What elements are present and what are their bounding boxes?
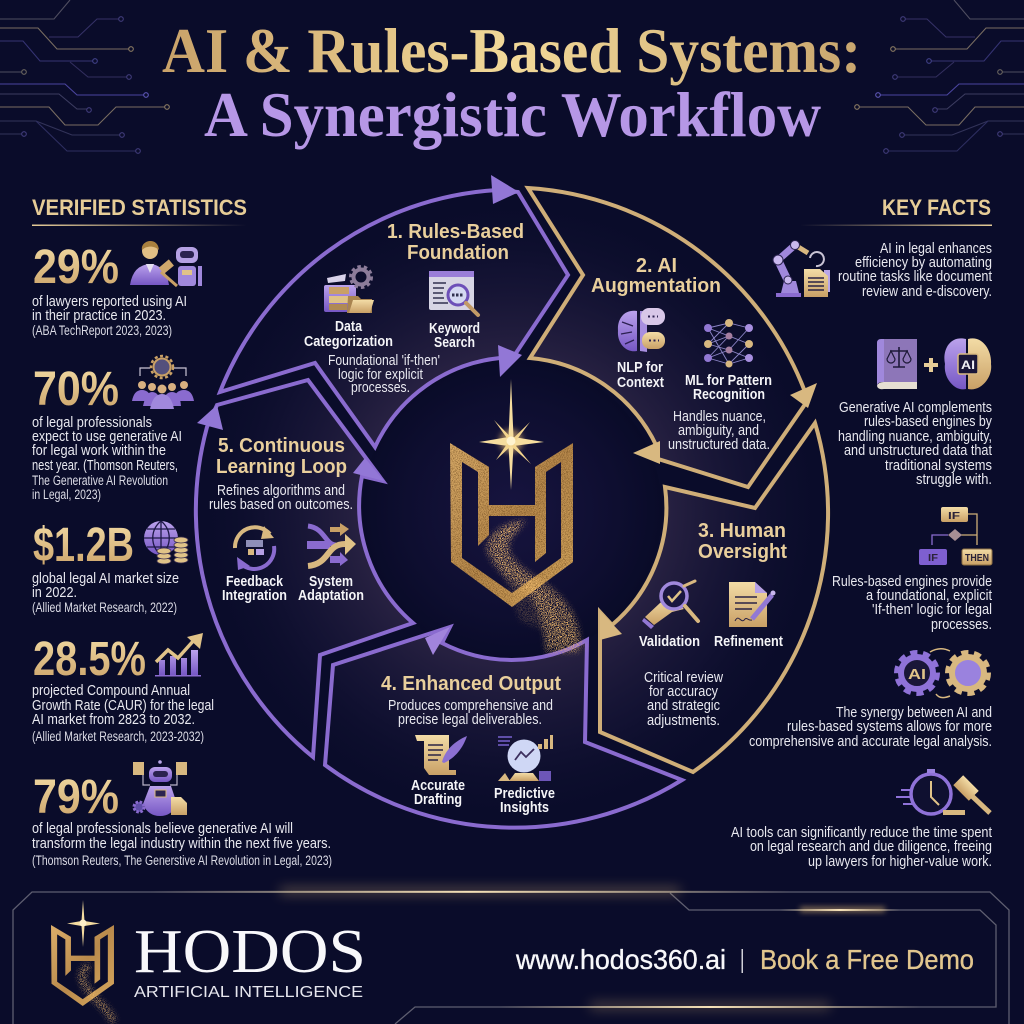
- icon: lawyer and robot: [130, 241, 202, 286]
- text: Rules-based engines provide: [832, 573, 992, 590]
- footer frame: [13, 892, 1009, 1024]
- label: refinement: Refinement: [714, 634, 783, 650]
- panel: step 1 rules-based foundation: [220, 175, 568, 447]
- text: transform the legal industry within the next five years.: [32, 835, 331, 852]
- icon: if-then flowchart: IF: [928, 553, 938, 564]
- description: Refines algorithms and: [217, 482, 345, 499]
- icon: stopwatch and gavel: [896, 769, 990, 815]
- arrowhead: [425, 627, 450, 655]
- text: projected Compound Annual: [32, 682, 190, 699]
- panel: key facts: [731, 195, 993, 870]
- fact 3: [832, 507, 993, 633]
- arrowheads: [197, 405, 384, 481]
- text: struggle with.: [916, 471, 992, 488]
- text: [838, 240, 993, 300]
- description: [388, 697, 553, 728]
- central core disc: [362, 360, 662, 660]
- label: feedback integration: Integration: [222, 588, 287, 604]
- segment outline: [220, 190, 568, 447]
- segment outline: [196, 380, 413, 757]
- description: precise legal deliverables.: [398, 711, 542, 728]
- text: [832, 573, 993, 633]
- circuit lines left: [0, 0, 169, 153]
- text: up lawyers for higher-value work.: [808, 853, 992, 870]
- text: AI market from 2823 to 2032.: [32, 711, 195, 728]
- heading: KEY FACTS: [882, 195, 991, 220]
- icon: globe and coins: [144, 521, 188, 564]
- icon: interlocked gears: [897, 649, 988, 698]
- text: [32, 570, 179, 615]
- icon: law book plus AI brain: AI: [961, 358, 975, 372]
- text: [32, 293, 187, 338]
- label: validation: Validation: [639, 634, 700, 650]
- panel: step 2 AI augmentation: [528, 188, 817, 487]
- stat: 79%: [32, 760, 332, 868]
- description: logic for explicit: [338, 366, 424, 383]
- text: Growth Rate (CAUR) for the legal: [32, 697, 214, 714]
- title: AI & Rules-Based Systems:: [162, 15, 861, 86]
- label: NLP for context: Context: [617, 375, 664, 391]
- heading: 4. Enhanced Output: [381, 673, 561, 695]
- text: [32, 414, 182, 502]
- panel: verified statistics: [32, 195, 332, 868]
- text: AI in legal enhances: [880, 240, 992, 257]
- icon: keyword search: [429, 271, 478, 315]
- icon: robot with documents: [133, 760, 187, 816]
- description: [644, 669, 723, 729]
- label: ML for pattern recognition: Recognition: [693, 387, 765, 403]
- text: [731, 824, 993, 870]
- text: global legal AI market size: [32, 570, 179, 587]
- stat: $1.2B: $1.2B: [33, 519, 134, 572]
- heading: [216, 435, 347, 478]
- description: and strategic: [647, 697, 720, 714]
- central HODOS logo: [450, 379, 590, 652]
- fact 1: [773, 240, 993, 300]
- heading: 2. AI: [636, 255, 677, 277]
- text: handling nuance, ambiguity,: [838, 428, 992, 445]
- text: for legal work within the: [32, 442, 166, 459]
- text: [749, 704, 992, 750]
- text: expect to use generative AI: [32, 428, 182, 445]
- icon: refinement: [729, 582, 776, 627]
- text: efficiency by automating: [855, 254, 992, 271]
- fact 4: [749, 649, 992, 750]
- heading: VERIFIED STATISTICS: [32, 195, 247, 220]
- description: [328, 352, 440, 396]
- shield H mark: [450, 443, 573, 607]
- icon: law book plus AI brain: [877, 338, 991, 389]
- text: of lawyers reported using AI: [32, 293, 187, 310]
- heading: [387, 221, 524, 264]
- text: (Allied Market Research, 2023-2032): [32, 729, 204, 744]
- text: [32, 682, 214, 744]
- text: a foundational, explicit: [866, 587, 993, 604]
- icon: growth chart: [155, 633, 203, 676]
- brand name: ARTIFICIAL INTELLIGENCE: [134, 984, 363, 1001]
- title: A Synergistic Workflow: [204, 79, 821, 150]
- segment outline: [325, 627, 682, 828]
- text: of legal professionals: [32, 414, 152, 431]
- label: data categorization: [304, 319, 393, 350]
- text: routine tasks like document: [838, 268, 993, 285]
- icon: ML network: [704, 319, 753, 368]
- text: [838, 399, 993, 488]
- description: Critical review: [644, 669, 723, 686]
- arrowhead: [600, 611, 622, 640]
- icon: interlocked gears: AI: [908, 666, 926, 683]
- label: feedback integration: [222, 574, 287, 604]
- fact 5: [731, 769, 993, 870]
- footer glows: [150, 888, 920, 1009]
- label: system adaptation: [298, 574, 364, 604]
- text: Generative AI complements: [839, 399, 992, 416]
- text: in 2022.: [32, 584, 77, 601]
- heading: Oversight: [698, 541, 787, 563]
- icon: if-then flowchart: THEN: [965, 553, 989, 564]
- label: predictive insights: [494, 786, 555, 816]
- text: in their practice in 2023.: [32, 307, 166, 324]
- text: in Legal, 2023): [32, 487, 101, 502]
- call to action: [515, 944, 974, 975]
- icon: team around gear: [132, 356, 194, 409]
- text: (ABA TechReport 2023, 2023): [32, 323, 172, 338]
- label: predictive insights: Predictive: [494, 786, 555, 802]
- description: unstructured data.: [668, 436, 770, 453]
- label: data categorization: Categorization: [304, 334, 393, 350]
- arrowheads: [491, 175, 522, 377]
- description: Foundational 'if-then': [328, 352, 440, 369]
- icon: accurate drafting: [415, 735, 467, 775]
- icon: if-then flowchart: IF: [948, 511, 960, 522]
- description: Produces comprehensive and: [388, 697, 553, 714]
- label: feedback integration: Feedback: [226, 574, 284, 590]
- icon: data categorization: [324, 266, 374, 313]
- heading rule: [800, 224, 992, 226]
- description: processes.: [351, 379, 410, 396]
- icon: robot arm with document: [773, 240, 830, 297]
- text: The Generative AI Revolution: [32, 473, 168, 488]
- circuit lines right: [855, 0, 1024, 153]
- heading: Foundation: [407, 242, 509, 264]
- stat: 70%: 70%: [33, 363, 119, 416]
- text: The synergy between AI and: [836, 704, 992, 721]
- label: accurate drafting: Accurate: [411, 778, 465, 794]
- label: keyword search: Search: [434, 335, 475, 351]
- description: ambiguity, and: [678, 422, 759, 439]
- brand name: HODOS: [134, 918, 366, 986]
- heading: 1. Rules-Based: [387, 221, 524, 243]
- fact 2: [838, 338, 993, 488]
- segment outline: [600, 423, 828, 772]
- label: data categorization: Data: [335, 319, 363, 335]
- text: and unstructured data that: [844, 442, 993, 459]
- panel: footer: [13, 888, 1009, 1024]
- stat: 29%: [32, 241, 202, 338]
- stat: 28.5%: [32, 633, 214, 744]
- heading: Learning Loop: [216, 456, 347, 478]
- icon: NLP brain: [618, 308, 665, 352]
- panel: step 3 human oversight: [600, 423, 828, 772]
- icon: if-then flowchart: [919, 507, 992, 565]
- segment outline: [528, 188, 808, 487]
- text: 'If-then' logic for legal: [872, 601, 992, 618]
- stat: $1.2B: [32, 519, 188, 615]
- description: rules based on outcomes.: [209, 496, 353, 513]
- description: Handles nuance,: [673, 408, 766, 425]
- stat: 29%: 29%: [33, 241, 119, 294]
- text: rules-based engines by: [864, 413, 992, 430]
- icon: validation: [642, 581, 698, 629]
- panel: step 4 enhanced output: [325, 627, 682, 828]
- text: rules-based systems allows for more: [787, 718, 992, 735]
- heading: 3. Human: [698, 520, 786, 542]
- icon: predictive insights: [498, 735, 553, 781]
- text: traditional systems: [885, 457, 992, 474]
- label: NLP for context: [617, 360, 664, 391]
- text: [32, 820, 332, 868]
- label: keyword search: [429, 321, 480, 351]
- icon: system adaptation: [307, 523, 356, 566]
- star: [479, 379, 544, 490]
- footer logo: [51, 900, 114, 1022]
- arrowheads: [633, 383, 817, 464]
- panel: step 5 continuous learning loop: [196, 380, 413, 757]
- text: nest year. (Thomson Reuters,: [32, 457, 178, 474]
- call to action: Book a Free Demo: [760, 944, 974, 975]
- heading: [698, 520, 787, 563]
- heading: [591, 255, 721, 297]
- label: predictive insights: Insights: [500, 800, 549, 816]
- label: NLP for context: NLP for: [617, 360, 663, 376]
- stat: 28.5%: 28.5%: [33, 633, 146, 686]
- heading rule: [32, 224, 247, 226]
- heading: Augmentation: [591, 275, 721, 297]
- label: accurate drafting: Drafting: [414, 792, 462, 808]
- label: accurate drafting: [411, 778, 465, 808]
- heading: 5. Continuous: [218, 435, 345, 457]
- stat: 70%: [32, 356, 194, 502]
- description: [668, 408, 770, 453]
- gold particle stream: [487, 520, 590, 652]
- description: [209, 482, 353, 513]
- text: (Allied Market Research, 2022): [32, 600, 177, 615]
- label: system adaptation: Adaptation: [298, 588, 364, 604]
- description: for accuracy: [649, 683, 718, 700]
- label: system adaptation: System: [309, 574, 353, 590]
- label: ML for pattern recognition: ML for Pattern: [685, 373, 772, 389]
- label: keyword search: Keyword: [429, 321, 480, 337]
- icon: feedback integration: [235, 526, 274, 570]
- title: [162, 15, 861, 150]
- text: processes.: [931, 616, 992, 633]
- description: adjustments.: [647, 712, 720, 729]
- call to action: www.hodos360.ai: [515, 944, 726, 975]
- stat: 79%: 79%: [33, 771, 119, 824]
- text: of legal professionals believe generative AI will: [32, 820, 293, 837]
- text: review and e-discovery.: [862, 283, 992, 300]
- label: ML for pattern recognition: [685, 373, 772, 403]
- text: (Thomson Reuters, The Generstive AI Revolution in Legal, 2023): [32, 853, 332, 868]
